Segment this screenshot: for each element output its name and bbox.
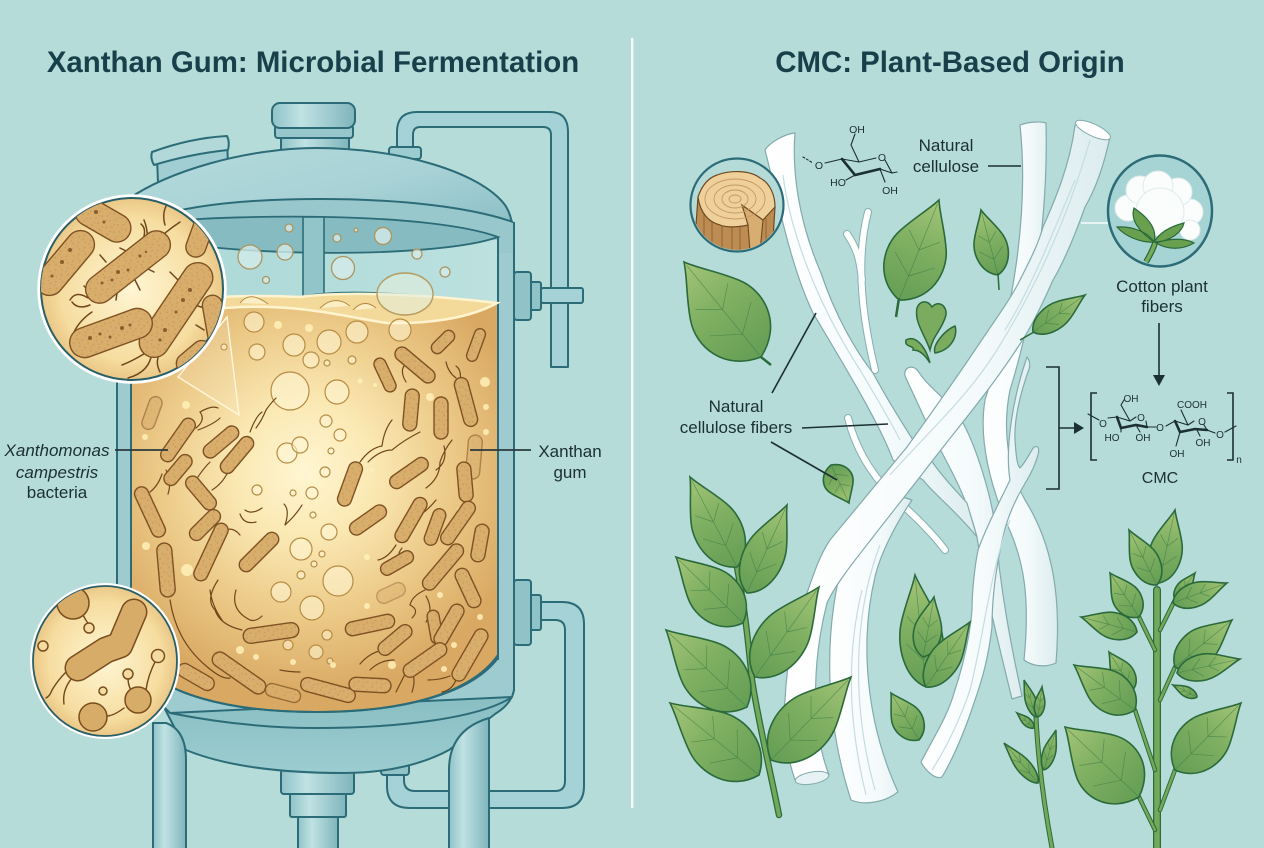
molecule: CMC repeat unit	[1088, 393, 1242, 466]
glass side lines	[131, 237, 498, 660]
molecule: CMC repeat unit: O	[1198, 417, 1206, 428]
molecule: CMC repeat unit: OH	[1196, 438, 1210, 449]
fiber C lower branch	[830, 490, 912, 803]
yellow droplets	[142, 321, 490, 672]
panel: cellulose fibers	[765, 117, 1113, 803]
drain valve	[281, 770, 354, 848]
interior shadow ellipse	[150, 217, 498, 253]
label: Xanthomonas campestris bacteria	[4, 441, 168, 502]
molecule: natural cellulose: O	[815, 160, 823, 172]
lower rim line	[170, 697, 512, 728]
lower circulation pipe	[381, 580, 584, 808]
fiber C texture	[851, 545, 880, 795]
foam surface	[160, 294, 497, 323]
cell speckles	[50, 210, 192, 342]
molecule: natural cellulose: O	[878, 152, 886, 164]
icon: wood cross-section	[690, 158, 784, 255]
bracket with arrow to CMC	[1046, 367, 1084, 489]
title: Xanthan Gum: Xanthan Gum: Microbial Fermentation	[47, 46, 579, 79]
fiber B end cap	[794, 769, 830, 787]
fiber B main	[784, 124, 1110, 782]
large surface bubble	[240, 273, 433, 315]
tank bottom bowl	[150, 660, 514, 773]
molecule: CMC repeat unit: O	[1156, 423, 1164, 434]
molecule: natural cellulose: OH	[849, 124, 865, 136]
magnifier 2: bacteria division	[32, 584, 178, 738]
molecule: CMC repeat unit: OH	[1124, 394, 1138, 405]
agitator shaft	[303, 217, 324, 301]
label: Natural cellulose fibers: Natural	[709, 397, 763, 416]
leaf: large left	[655, 238, 790, 381]
right wall outer line	[513, 222, 515, 690]
leaf: upper right small	[965, 206, 1014, 279]
fiber D	[983, 122, 1058, 666]
label: Natural cellulose: Natural	[919, 136, 973, 155]
label: Xanthan gum	[470, 442, 602, 482]
callout wedge to point in liquid	[178, 317, 239, 415]
fiber B texture	[890, 140, 1090, 475]
label: Cotton plant fibers: Cotton plant	[1116, 277, 1208, 296]
leaf: small bottom center	[878, 685, 932, 748]
leaf stem: top center	[896, 298, 899, 317]
leaf stem: upper right small	[998, 273, 999, 290]
label: Xanthan gum: gum	[553, 463, 587, 482]
molecule: CMC repeat unit: OH	[1136, 433, 1150, 444]
center bottom leaf cluster	[894, 573, 982, 695]
arrow: cotton to CMC	[1153, 323, 1165, 386]
leaf: right branch	[1026, 285, 1092, 342]
dome rim line	[150, 199, 513, 222]
molecule: CMC repeat unit: OH	[1170, 449, 1184, 460]
bacteria cells	[132, 327, 491, 704]
label: Cotton plant fibers	[1116, 277, 1208, 316]
label: Natural cellulose fibers: cellulose fibers	[680, 418, 792, 437]
molecule: natural cellulose: HO	[830, 177, 846, 189]
fiber A	[765, 133, 977, 537]
bubbles above liquid	[238, 224, 450, 284]
tank dome	[117, 148, 514, 250]
left plant	[645, 466, 871, 815]
upper condenser pipe	[389, 112, 568, 367]
fiber B top cap	[1073, 117, 1113, 143]
connector from fiber to cotton	[1081, 222, 1108, 224]
panel divider	[631, 38, 633, 808]
liquid body	[131, 293, 498, 712]
small center plant	[999, 678, 1062, 848]
icon: cotton boll	[1108, 156, 1212, 266]
liquid bubbles	[221, 312, 411, 664]
label: Natural cellulose	[913, 136, 1021, 176]
right side connector	[514, 272, 583, 320]
molecule: CMC repeat unit: COOH	[1177, 400, 1207, 411]
leaf stem: large left	[761, 357, 771, 365]
label: Xanthomonas campestris bacteria: Xanthomonas	[4, 441, 110, 460]
label: Natural cellulose: cellulose	[913, 157, 979, 176]
fiber G	[905, 367, 1022, 699]
bowl rim line	[131, 655, 498, 712]
title: CMC: CMC: Plant-Based Origin	[775, 46, 1125, 79]
label: Xanthomonas campestris bacteria: campestris	[16, 463, 99, 482]
leaf: top center	[871, 189, 967, 311]
fiber E	[921, 357, 1039, 778]
fiber A texture	[783, 175, 900, 440]
panel: fermentation tank	[30, 103, 584, 848]
bacteria flagella	[150, 362, 460, 692]
leaf stem: right branch	[1020, 332, 1034, 340]
tank legs	[153, 718, 489, 848]
molecule: natural cellulose	[803, 124, 898, 197]
label: Natural cellulose fibers	[680, 313, 888, 480]
molecule: CMC repeat unit: O	[1216, 430, 1224, 441]
right plant	[1042, 507, 1259, 848]
tank top cap	[272, 103, 355, 155]
molecule: CMC repeat unit: n	[1236, 455, 1242, 466]
seedling	[906, 302, 956, 363]
tank interior glass	[131, 240, 498, 660]
thin fiber branches	[847, 212, 945, 550]
label: Xanthomonas campestris bacteria: bacteria	[27, 483, 88, 502]
leaf: tiny under label	[818, 459, 862, 509]
molecule: natural cellulose: OH	[882, 185, 898, 197]
label: Xanthan gum: Xanthan	[538, 442, 602, 461]
molecule: CMC repeat unit: HO	[1104, 433, 1120, 444]
tank walls	[117, 225, 514, 713]
molecule: CMC repeat unit: O	[1137, 413, 1145, 424]
dome rim band	[131, 199, 513, 253]
label: CMC: CMC	[1142, 470, 1178, 487]
magnifier 1: bacteria close-up	[30, 193, 229, 382]
label: Cotton plant fibers: fibers	[1141, 297, 1183, 316]
tank hatch	[151, 136, 229, 183]
fiber E texture	[932, 520, 1010, 770]
molecule: CMC repeat unit: O	[1099, 419, 1107, 430]
